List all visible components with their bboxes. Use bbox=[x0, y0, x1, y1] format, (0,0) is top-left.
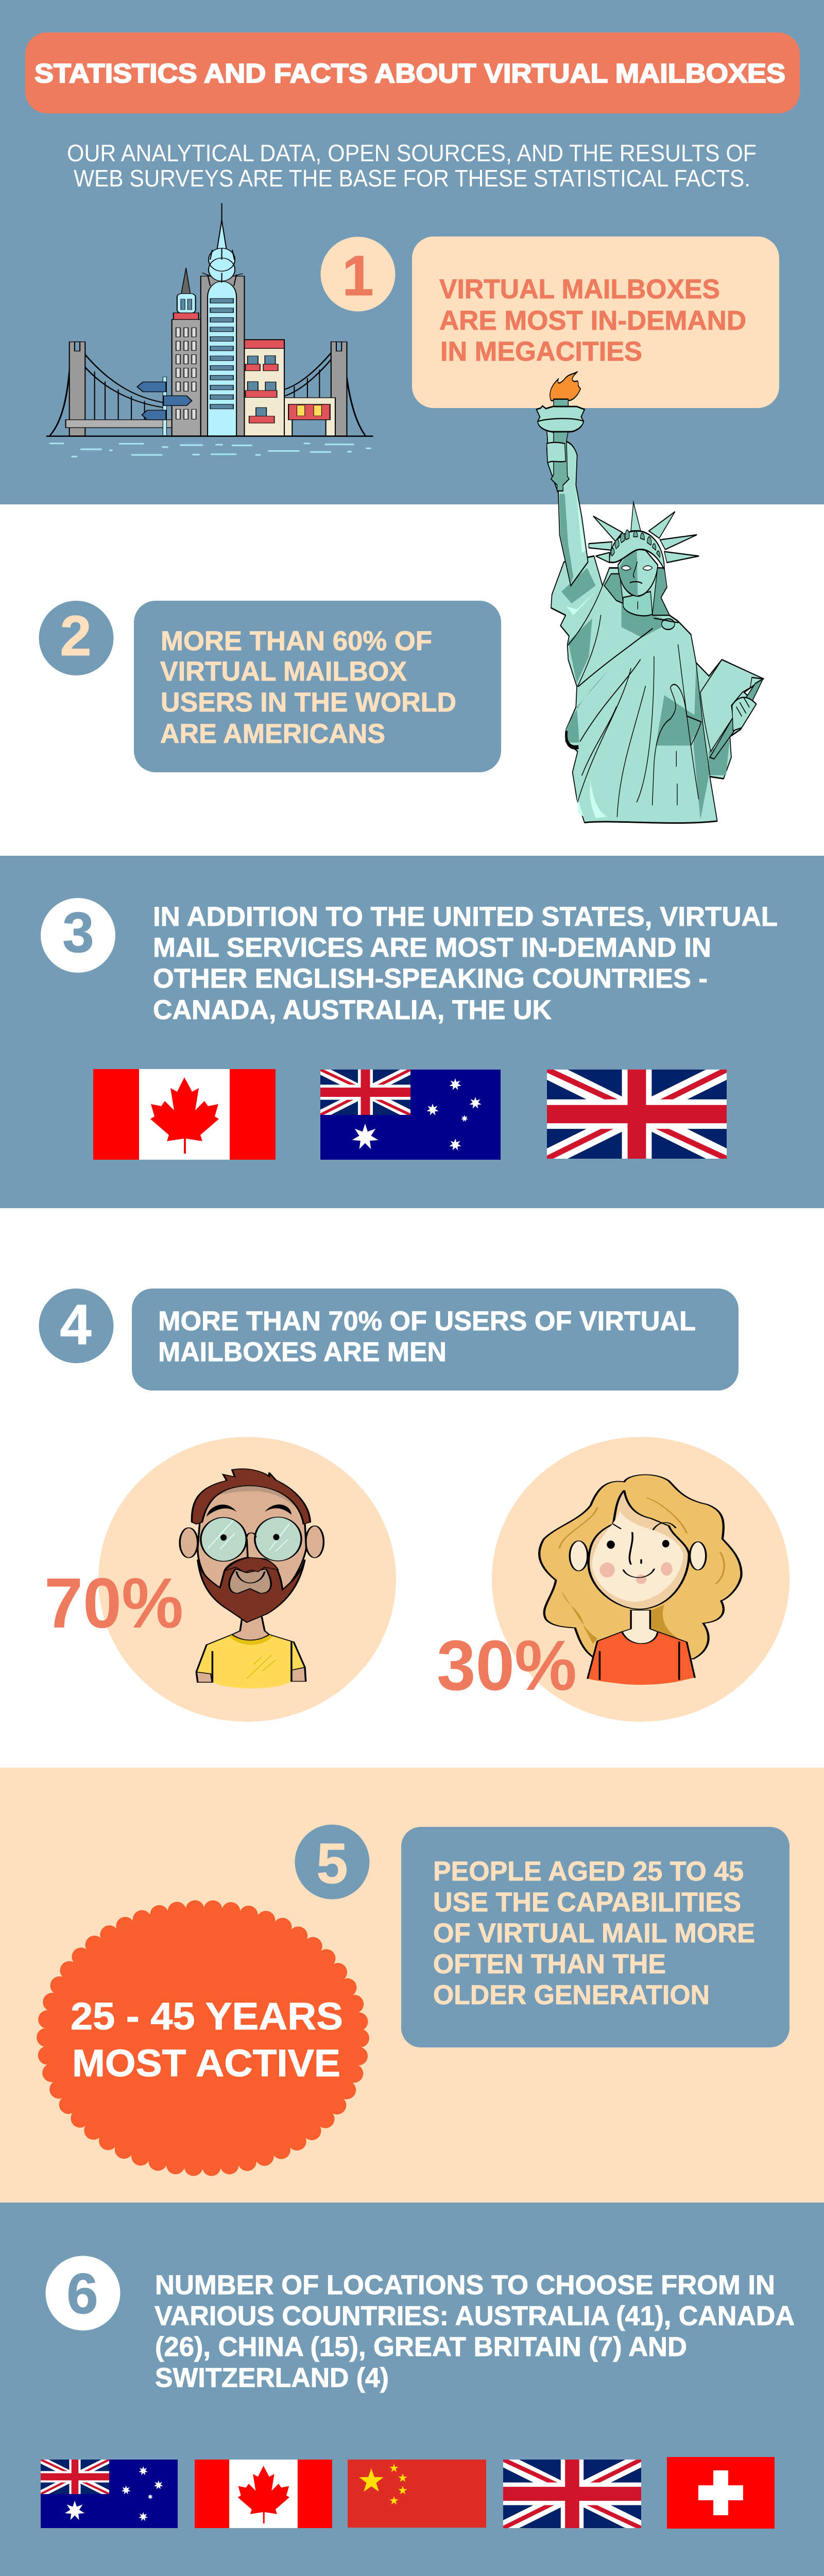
fact 4 text box bbox=[132, 1289, 739, 1391]
number badge 2 bbox=[39, 601, 113, 675]
illustration: bearded man with glasses bbox=[180, 1469, 323, 1688]
fact 2 text box: ARE AMERICANS bbox=[160, 719, 385, 749]
scalloped badge: 25-45 years most active: 25 - 45 YEARS bbox=[71, 1995, 343, 2038]
fact 6 text bbox=[154, 2270, 795, 2393]
fact 5 text box bbox=[401, 1827, 789, 2047]
title banner: STATISTICS AND FACTS ABOUT VIRTUAL MAILBOXES bbox=[35, 59, 785, 89]
flag: United Kingdom bbox=[503, 2460, 641, 2528]
fact 6 text: SWITZERLAND (4) bbox=[155, 2363, 389, 2393]
fact 1 text box bbox=[412, 236, 779, 408]
oval background: man bbox=[98, 1437, 396, 1722]
fact 5 text box: OF VIRTUAL MAIL MORE bbox=[433, 1918, 755, 1948]
fact 4 text box: MORE THAN 70% OF USERS OF VIRTUAL bbox=[158, 1306, 696, 1336]
scalloped badge: 25-45 years most active: MOST ACTIVE bbox=[72, 2042, 340, 2084]
illustration: woman with blonde curly hair bbox=[539, 1475, 742, 1685]
subtitle: OUR ANALYTICAL DATA, OPEN SOURCES, AND THE RESULTS OF bbox=[67, 140, 757, 166]
oval background: woman bbox=[492, 1437, 789, 1722]
fact 2 text box bbox=[134, 601, 501, 772]
flag: China bbox=[348, 2460, 486, 2528]
fact 1 text box: ARE MOST IN-DEMAND bbox=[439, 306, 746, 336]
panel: fact 5 bbox=[0, 1768, 824, 2202]
fact 5 text box: OLDER GENERATION bbox=[433, 1980, 710, 2010]
number badge 3: 3 bbox=[62, 901, 94, 964]
number badge 4: 4 bbox=[60, 1293, 92, 1357]
number badge 3 bbox=[41, 898, 115, 973]
panel: intro and fact 1 bbox=[0, 0, 824, 504]
fact 5 text box: PEOPLE AGED 25 TO 45 bbox=[433, 1856, 744, 1887]
number badge 5: 5 bbox=[316, 1832, 348, 1895]
fact 6 text: VARIOUS COUNTRIES: AUSTRALIA (41), CANADA bbox=[154, 2301, 795, 2331]
fact 2 text box: USERS IN THE WORLD bbox=[161, 687, 456, 718]
illustration: city skyline with bridge bbox=[46, 203, 373, 456]
fact 5 text box: OFTEN THAN THE bbox=[433, 1949, 666, 1979]
fact 3 text: CANADA, AUSTRALIA, THE UK bbox=[153, 995, 552, 1025]
number badge 4 bbox=[39, 1289, 113, 1363]
fact 2 text box: VIRTUAL MAILBOX bbox=[160, 656, 407, 687]
flag: Canada bbox=[93, 1069, 276, 1160]
panel: fact 4 bbox=[0, 1208, 824, 1768]
fact 5 text box: USE THE CAPABILITIES bbox=[433, 1887, 741, 1918]
fact 3 text: MAIL SERVICES ARE MOST IN-DEMAND IN bbox=[153, 933, 711, 963]
fact 3 text: OTHER ENGLISH-SPEAKING COUNTRIES - bbox=[153, 963, 708, 994]
flag: Australia bbox=[41, 2460, 178, 2528]
stat: 30%: 30% bbox=[437, 1626, 577, 1705]
fact 3 text bbox=[153, 902, 778, 1025]
flag: Switzerland bbox=[667, 2457, 775, 2529]
panel: fact 6 bbox=[0, 2202, 824, 2576]
fact 1 text box: IN MEGACITIES bbox=[440, 336, 642, 367]
number badge 1 bbox=[320, 237, 396, 311]
flag: Australia bbox=[320, 1070, 501, 1160]
fact 6 text: (26), CHINA (15), GREAT BRITAIN (7) AND bbox=[155, 2332, 687, 2362]
flag: Canada bbox=[195, 2460, 332, 2528]
panel: fact 2 bbox=[0, 504, 824, 856]
number badge 6 bbox=[45, 2256, 121, 2331]
scalloped badge: 25-45 years most active bbox=[46, 1909, 360, 2167]
number badge 2: 2 bbox=[60, 604, 92, 668]
flag: United Kingdom bbox=[547, 1070, 727, 1159]
title banner bbox=[25, 32, 800, 113]
subtitle: WEB SURVEYS ARE THE BASE FOR THESE STATISTICAL FACTS. bbox=[74, 165, 750, 192]
number badge 5 bbox=[295, 1825, 370, 1899]
subtitle bbox=[67, 140, 757, 192]
fact 4 text box: MAILBOXES ARE MEN bbox=[158, 1337, 447, 1367]
number badge 1: 1 bbox=[342, 244, 374, 308]
fact 3 text: IN ADDITION TO THE UNITED STATES, VIRTUAL bbox=[153, 902, 778, 932]
panel: fact 3 bbox=[0, 856, 824, 1208]
fact 2 text box: MORE THAN 60% OF bbox=[161, 626, 432, 656]
stat: 70%: 70% bbox=[44, 1564, 183, 1643]
fact 6 text: NUMBER OF LOCATIONS TO CHOOSE FROM IN bbox=[155, 2270, 775, 2300]
number badge 6: 6 bbox=[66, 2262, 98, 2326]
fact 1 text box: VIRTUAL MAILBOXES bbox=[439, 274, 720, 304]
illustration: Statue of Liberty bbox=[537, 371, 764, 823]
